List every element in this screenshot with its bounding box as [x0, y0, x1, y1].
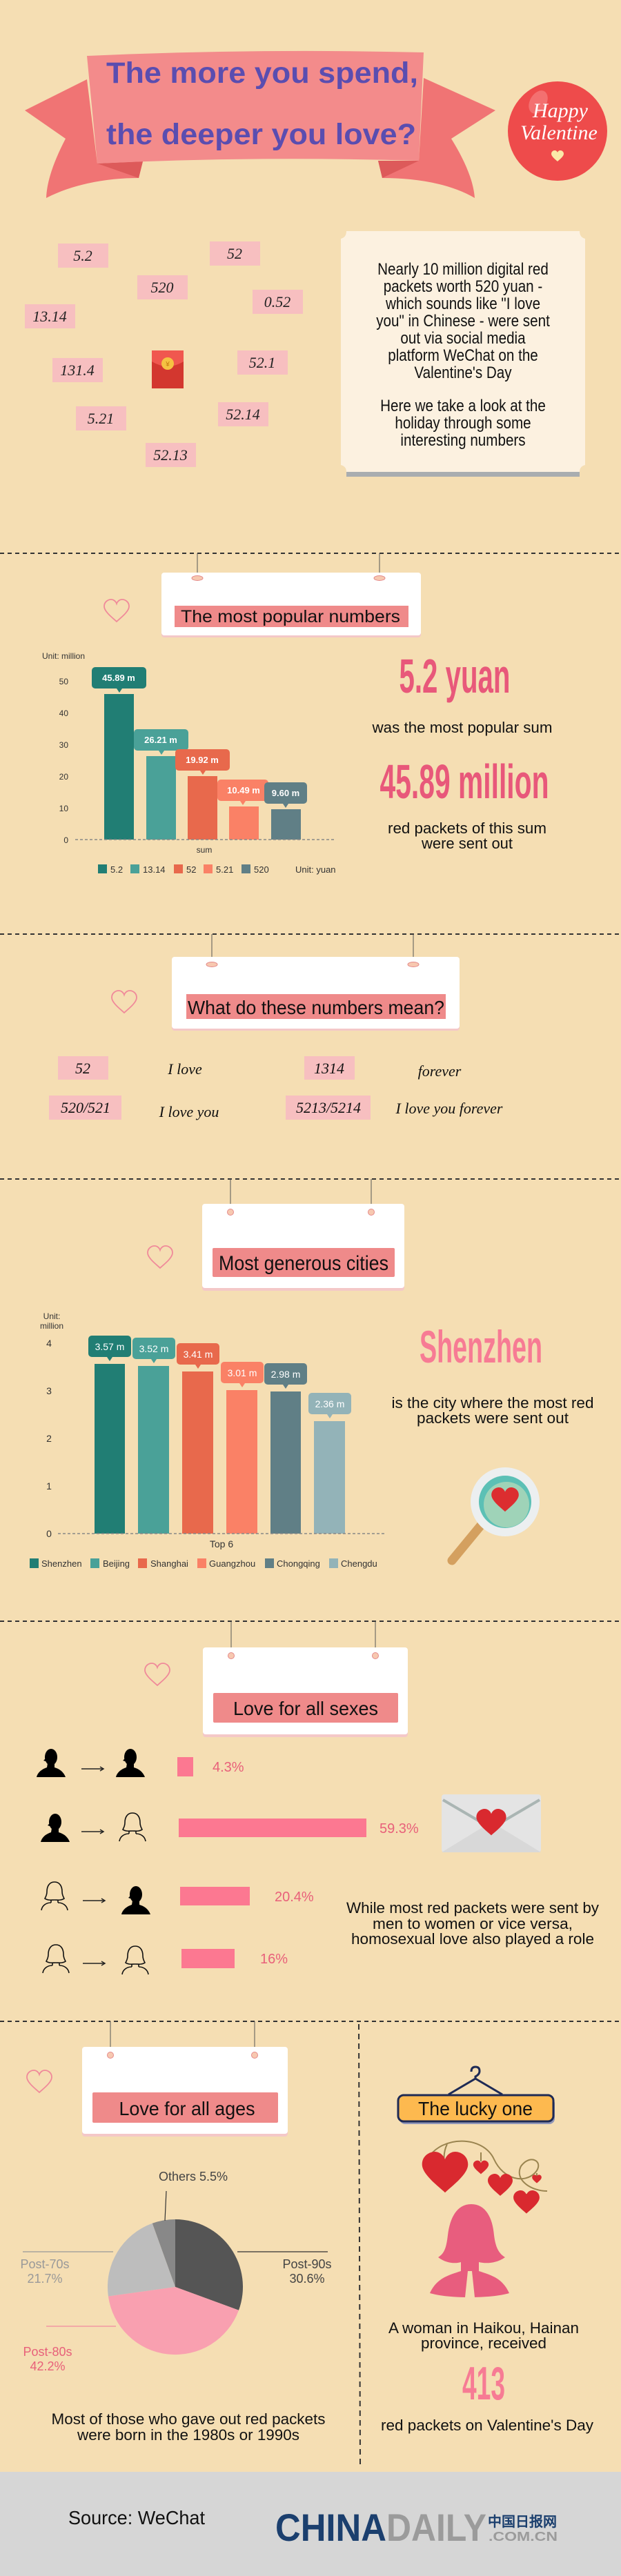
icon: heart outline [148, 1246, 172, 1268]
header card: love for all ages: Love for all ages [119, 2098, 255, 2119]
title text: The more you spend, [106, 57, 418, 90]
number meanings: I love you [159, 1103, 219, 1120]
bar chart: cities: Shanghai [150, 1558, 188, 1569]
text: lucky one: 413 [462, 2357, 505, 2410]
icon: heart outline [27, 2070, 52, 2092]
title banner [25, 51, 495, 198]
header card: most generous cities [202, 1179, 404, 1291]
number tags: 52.1 [249, 354, 275, 371]
logo: china daily: .COM.CN [489, 2530, 558, 2544]
bar chart: popular sums: 50 [59, 677, 68, 686]
number tags: 52 [227, 245, 242, 262]
intro text card: out via social media [400, 329, 526, 347]
bar chart: popular sums [42, 651, 336, 875]
header card: love for all sexes: Love for all sexes [233, 1698, 378, 1719]
text: ages caption [51, 2410, 326, 2444]
bar chart: popular sums: 30 [59, 740, 68, 750]
number meanings [49, 1056, 503, 1120]
bar chart: popular sums: 5.21 [216, 864, 233, 875]
icon: heart outline [104, 600, 129, 622]
bar chart: cities: 3.57 m [95, 1341, 124, 1352]
bar chart: popular sums: sum [197, 845, 212, 855]
bar chart: popular sums: 19.92 m [186, 755, 219, 765]
number tags: 131.4 [60, 361, 95, 379]
bar chart: cities: Beijing [103, 1558, 130, 1569]
header card: love for all ages [82, 2021, 288, 2137]
stat: 5.2 yuan: red packets of this sum [388, 820, 546, 837]
bar chart: cities: Chongqing [277, 1558, 320, 1569]
bar chart: cities: Chengdu [341, 1558, 377, 1569]
intro text card: interesting numbers [400, 431, 526, 449]
bar chart: popular sums: Unit: yuan [295, 864, 336, 875]
text: sexes caption [346, 1899, 599, 1948]
pie chart: ages: Post-80s [23, 2345, 72, 2359]
stat: 5.2 yuan: 5.2 yuan [399, 649, 511, 703]
pie chart: ages: Post-70s [20, 2257, 70, 2271]
icon: magnifier with heart [452, 1467, 540, 1561]
pie chart: ages [20, 2170, 332, 2373]
bar chart: popular sums: 520 [254, 864, 269, 875]
text: sexes caption: men to women or vice versa, [373, 1915, 573, 1932]
row: male to female [41, 1813, 419, 1842]
row: female to female [43, 1945, 288, 1974]
pie chart: ages: 42.2% [30, 2359, 66, 2373]
intro text card: platform WeChat on the [388, 346, 538, 364]
bar chart: cities: 2.98 m [271, 1369, 300, 1380]
bar chart: cities: Guangzhou [209, 1558, 255, 1569]
bar chart: popular sums: 40 [59, 709, 68, 718]
bar chart: cities: 3 [46, 1385, 52, 1396]
number tags [25, 241, 303, 467]
bar chart: cities: 3.01 m [228, 1367, 257, 1378]
bar chart: popular sums: 26.21 m [144, 735, 177, 745]
logo: china daily: 中国日报网 [488, 2513, 557, 2530]
intro text card: Here we take a look at the [380, 397, 546, 415]
row: male to male: 4.3% [213, 1760, 244, 1775]
bar chart: cities: million [40, 1321, 63, 1331]
bar chart: popular sums: 52 [186, 864, 196, 875]
stat: shenzhen [392, 1321, 593, 1427]
text: ages caption: Most of those who gave out red packets [51, 2410, 326, 2428]
bar chart: popular sums: Unit: million [42, 651, 85, 661]
bar chart: cities: 3.52 m [139, 1343, 168, 1354]
stat: shenzhen: packets were sent out [417, 1409, 569, 1427]
bar chart: cities: 3.41 m [184, 1349, 213, 1360]
number meanings: 5213/5214 [296, 1099, 361, 1116]
header card: most popular numbers [161, 553, 421, 637]
number meanings: 1314 [314, 1060, 344, 1077]
pie chart: ages: Post-90s [282, 2257, 332, 2271]
bar chart: cities: 2.36 m [315, 1398, 344, 1409]
header card: most popular numbers: The most popular numbers [181, 607, 400, 626]
intro text card: Valentine's Day [414, 364, 512, 382]
title text: the deeper you love? [106, 118, 416, 151]
intro text card [341, 231, 585, 477]
bar chart: popular sums: 45.89 m [102, 673, 135, 683]
header card: what do these numbers mean: What do these numbers mean? [188, 997, 444, 1018]
number meanings: 520/521 [61, 1099, 110, 1116]
bar chart: popular sums: 10.49 m [227, 785, 260, 795]
row: female to male [41, 1882, 314, 1914]
label: the lucky one [398, 2067, 555, 2124]
header card: most generous cities: Most generous cities [219, 1252, 388, 1275]
gender rows [37, 1749, 419, 1974]
number tags: 520 [150, 279, 174, 296]
title text [106, 57, 418, 151]
stat: 5.2 yuan: were sent out [421, 835, 513, 852]
bar chart: cities: Unit: [43, 1311, 60, 1321]
bar chart: popular sums: 13.14 [143, 864, 166, 875]
icon: envelope [442, 1794, 541, 1852]
text: sexes caption: homosexual love also played a role [351, 1930, 594, 1948]
intro text card: which sounds like "I love [385, 295, 540, 313]
label: the lucky one: The lucky one [418, 2098, 533, 2119]
intro text card: you" in Chinese - were sent [376, 312, 551, 330]
logo: china daily: CHINA [275, 2506, 386, 2549]
header card: what do these numbers mean [172, 934, 460, 1031]
text: lucky one: A woman in Haikou, Hainan [388, 2319, 579, 2337]
stat: 5.2 yuan: was the most popular sum [371, 719, 552, 736]
bar chart: popular sums: 5.2 [110, 864, 123, 875]
number tags: 5.21 [88, 410, 114, 427]
logo: china daily [275, 2506, 558, 2549]
number tags: 13.14 [32, 308, 67, 325]
row: female to female: 16% [260, 1952, 288, 1967]
source: Source: WeChat [68, 2507, 205, 2528]
number tags: 5.2 [73, 247, 92, 264]
stat: 5.2 yuan [371, 649, 552, 852]
text: ages caption: were born in the 1980s or 1990s [77, 2426, 299, 2444]
pie chart: ages: 21.7% [27, 2272, 63, 2286]
bar chart: popular sums: 9.60 m [272, 788, 299, 798]
text: lucky one [381, 2319, 593, 2434]
row: female to male: 20.4% [275, 1890, 314, 1905]
intro text card: Nearly 10 million digital red [377, 260, 549, 278]
pie chart: ages: Others 5.5% [159, 2170, 228, 2183]
text: sexes caption: While most red packets were sent by [346, 1899, 599, 1916]
illustration: hearts vine and woman [422, 2141, 547, 2297]
badge: happy valentine: Valentine [520, 121, 598, 144]
badge: happy valentine: Happy [532, 99, 589, 122]
bar chart: cities: 4 [46, 1338, 52, 1349]
bar chart: cities: Shenzhen [41, 1558, 82, 1569]
header card: love for all sexes [203, 1621, 408, 1737]
footer [0, 2472, 621, 2576]
bar chart: cities: 1 [46, 1480, 52, 1492]
icon: red packet: ¥ [165, 361, 170, 368]
icon: heart outline [112, 991, 137, 1013]
icon: red packet [152, 350, 184, 388]
number tags: 52.14 [226, 406, 260, 423]
number tags: 0.52 [264, 293, 290, 310]
bar chart: cities [30, 1311, 386, 1569]
bar chart: popular sums: 20 [59, 772, 68, 782]
bar chart: popular sums: 10 [59, 804, 68, 813]
bar chart: popular sums: 0 [63, 835, 68, 845]
icon: heart outline [145, 1663, 170, 1685]
logo: china daily: DAILY [386, 2506, 486, 2549]
number tags: 52.13 [153, 446, 188, 464]
number meanings: I love [167, 1060, 202, 1078]
bar chart: cities: Top 6 [210, 1538, 233, 1549]
row: male to male [37, 1749, 244, 1777]
intro text card: packets worth 520 yuan - [384, 277, 542, 295]
stat: shenzhen: is the city where the most red [392, 1394, 593, 1411]
row: male to female: 59.3% [379, 1821, 419, 1836]
text: lucky one: province, received [421, 2335, 546, 2352]
number meanings: forever [418, 1062, 462, 1080]
pie chart: ages: 30.6% [289, 2272, 325, 2286]
number meanings: 52 [75, 1060, 90, 1077]
bar chart: cities: 0 [46, 1528, 52, 1539]
text: lucky one: red packets on Valentine's Day [381, 2417, 593, 2434]
bar chart: cities: 2 [46, 1433, 52, 1444]
intro text card: holiday through some [395, 414, 531, 432]
number meanings: I love you forever [395, 1100, 503, 1117]
badge: happy valentine [508, 81, 607, 181]
